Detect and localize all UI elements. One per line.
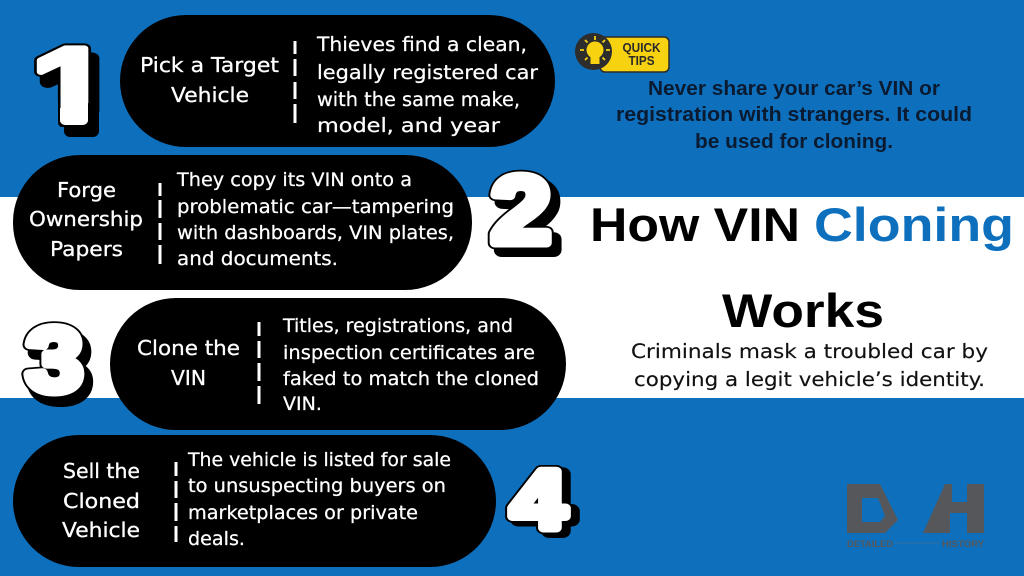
step 3 description: inspection certificates are xyxy=(283,343,535,364)
number 4: 4 xyxy=(511,453,566,546)
step 4 heading xyxy=(62,459,140,542)
quick tip text: be used for cloning. xyxy=(695,131,893,153)
step 2 description: problematic car—tampering xyxy=(177,197,454,218)
step 2 heading xyxy=(29,178,143,261)
number 2: 2 xyxy=(491,157,551,264)
number 4: 4 xyxy=(517,456,572,549)
panel: step 3 clone the vin xyxy=(110,298,566,430)
number 3: 3 xyxy=(26,310,83,411)
logo: detailed history xyxy=(847,484,985,550)
icon: quick tips badge xyxy=(575,33,669,72)
step 4 description: The vehicle is listed for sale xyxy=(187,450,451,471)
number 1: 1 xyxy=(38,35,118,155)
number 4: 4 xyxy=(511,453,566,546)
icon: quick tips badge: QUICK xyxy=(622,40,661,55)
logo: detailed history: HISTORY xyxy=(942,539,985,550)
step 3 description: Titles, registrations, and xyxy=(282,316,513,337)
subtitle: Criminals mask a troubled car by xyxy=(631,340,988,363)
step 4 heading: Vehicle xyxy=(62,518,140,542)
number 2: 2 xyxy=(498,164,558,271)
subtitle: copying a legit vehicle’s identity. xyxy=(634,368,985,391)
quick tip text xyxy=(616,78,972,153)
icon: quick tips badge: TIPS xyxy=(628,53,655,68)
step 2 heading: Forge xyxy=(57,178,116,202)
step 1 description xyxy=(316,33,539,137)
step 3 heading xyxy=(137,336,240,390)
panel: step 1 pick a target vehicle xyxy=(120,15,555,147)
panel: step 4 sell the cloned vehicle xyxy=(13,435,496,567)
quick tip text: Never share your car’s VIN or xyxy=(648,78,940,100)
step 1 heading xyxy=(140,53,279,107)
number 3: 3 xyxy=(32,318,89,419)
step 3 heading: VIN xyxy=(171,366,206,390)
step 2 description: They copy its VIN onto a xyxy=(176,170,412,191)
number 2: 2 xyxy=(491,157,551,264)
step 2 heading: Papers xyxy=(50,237,123,261)
step 2 heading: Ownership xyxy=(29,207,143,231)
number 3: 3 xyxy=(26,310,83,411)
step 1 description: model, and year xyxy=(317,114,501,137)
step 2 description xyxy=(176,170,454,270)
subtitle xyxy=(631,340,988,391)
step 4 description xyxy=(187,450,451,550)
step 1 description: with the same make, xyxy=(317,88,520,111)
title xyxy=(590,198,1014,337)
number 1: 1 xyxy=(31,25,111,145)
step 4 description: marketplaces or private xyxy=(188,503,418,524)
step 1 heading: Vehicle xyxy=(171,83,249,107)
step 3 description: VIN. xyxy=(283,394,322,415)
step 3 heading: Clone the xyxy=(137,336,240,360)
step 2 description: and documents. xyxy=(177,249,338,270)
step 2 description: with dashboards, VIN plates, xyxy=(177,223,454,244)
step 3 description xyxy=(282,316,539,415)
step 3 description: faked to match the cloned xyxy=(283,369,539,390)
step 1 heading: Pick a Target xyxy=(140,53,279,77)
step 1 description: legally registered car xyxy=(317,61,539,84)
title: Works xyxy=(722,284,884,337)
number 1: 1 xyxy=(31,25,111,145)
title: Cloning xyxy=(814,198,1014,251)
step 4 description: deals. xyxy=(188,529,245,550)
logo: detailed history: DETAILED xyxy=(847,539,893,550)
step 4 heading: Cloned xyxy=(63,489,140,513)
panel: step 2 forge ownership papers xyxy=(13,155,472,290)
quick tip text: registration with strangers. It could xyxy=(616,104,972,126)
step 4 heading: Sell the xyxy=(63,459,140,483)
title: How VIN xyxy=(590,198,800,251)
step 1 description: Thieves find a clean, xyxy=(316,33,527,56)
step 4 description: to unsuspecting buyers on xyxy=(188,476,446,497)
